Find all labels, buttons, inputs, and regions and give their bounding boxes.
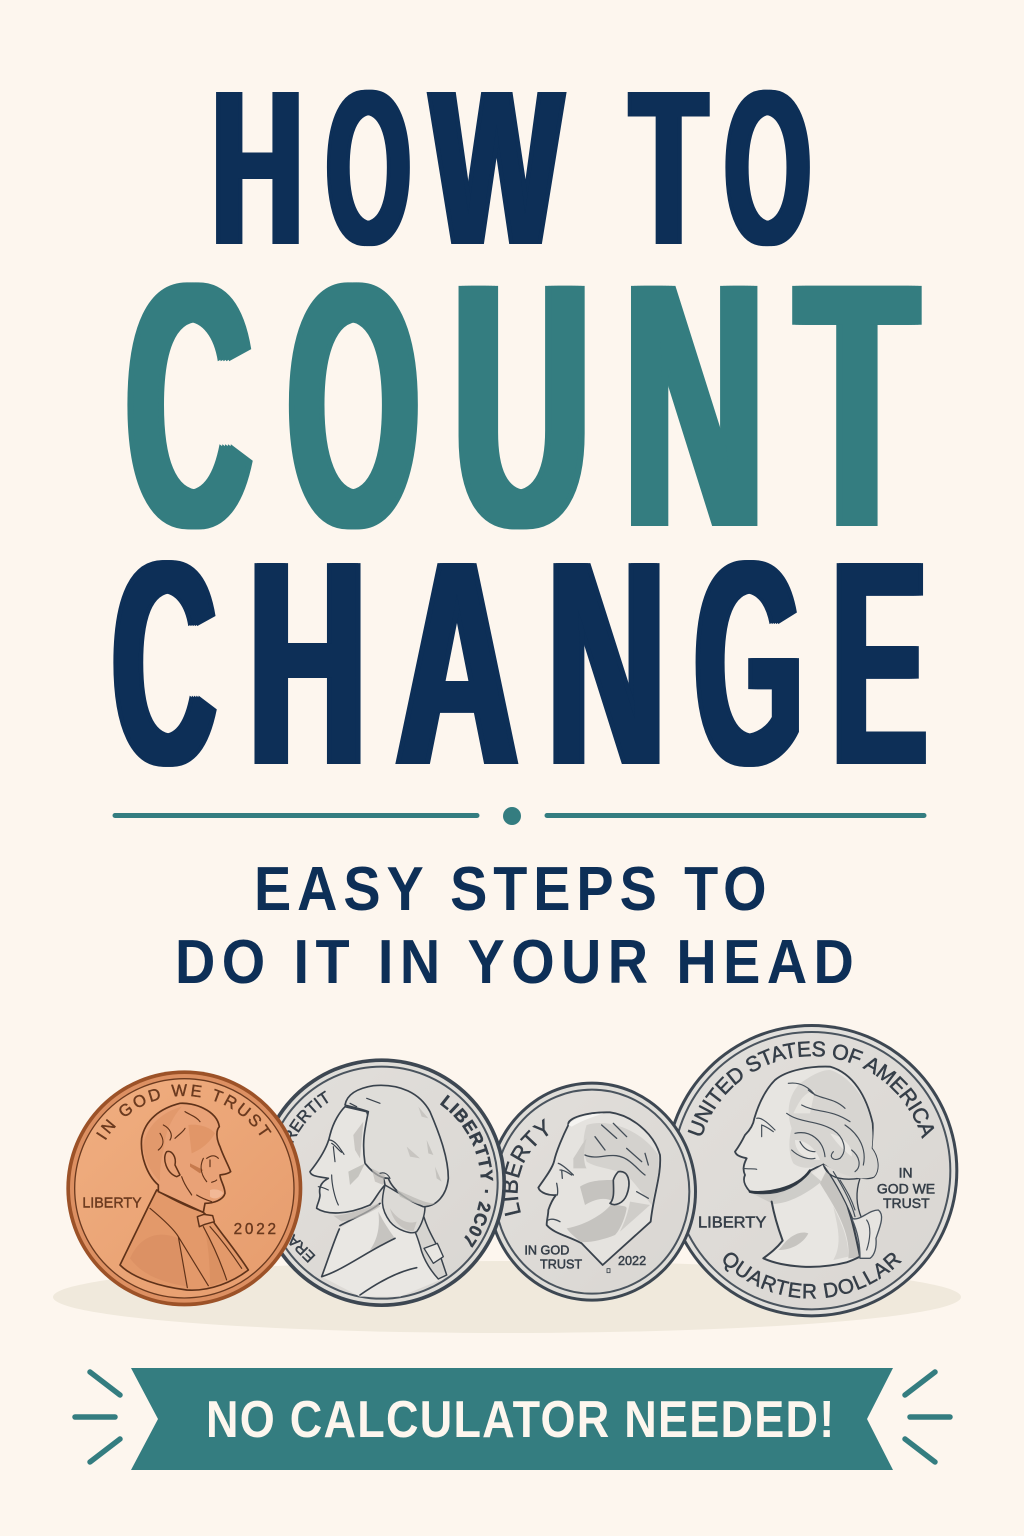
quarter motto: TRUST: [883, 1195, 930, 1211]
title line: HOW TO: H: [212, 44, 303, 291]
title line: CHANGE: G: [694, 500, 803, 826]
Roosevelt ear: [610, 1172, 629, 1205]
nickel lower left legend: ERA: [284, 1230, 319, 1265]
title line: CHANGE: H: [249, 500, 366, 826]
nickel left legend: RERTIT: [287, 1090, 328, 1143]
nickel right legend: ILIBERTTY · 2C07T: [440, 1094, 494, 1248]
Washington portrait: [735, 1067, 882, 1267]
Lincoln lines: [150, 1112, 242, 1288]
Jefferson lower hair: [382, 1185, 425, 1233]
dime motto: TRUST: [540, 1258, 582, 1272]
banner ribbon: [131, 1368, 893, 1470]
coin shadow: [53, 1261, 961, 1333]
banner text: NO CALCULATOR NEEDED!: [206, 1391, 835, 1449]
Roosevelt hair strands: [548, 1123, 648, 1222]
title: [112, 44, 927, 826]
icon: left burst lines: [75, 1372, 120, 1462]
Jefferson jacket: [322, 1203, 444, 1297]
Lincoln ear: [165, 1151, 180, 1177]
Lincoln portrait: [120, 1103, 248, 1290]
icon: nickel: [277, 1058, 506, 1307]
quarter motto: IN: [899, 1165, 913, 1181]
Roosevelt shading: [567, 1113, 659, 1242]
Lincoln coat: [120, 1190, 248, 1290]
icon: quarter: [673, 1024, 958, 1318]
title line: COUNT: U: [453, 210, 590, 600]
quarter motto: GOD WE: [877, 1180, 935, 1196]
Lincoln head: [141, 1103, 231, 1212]
Roosevelt bust: [538, 1112, 660, 1265]
Washington hair highlights: [793, 1090, 852, 1160]
title line: HOW TO: O: [724, 44, 811, 291]
dime motto: [524, 1243, 646, 1272]
Jefferson jacket shading: [370, 1212, 395, 1250]
Jefferson ribbon: [424, 1243, 443, 1263]
dime liberty: LIBERTY: [504, 1118, 548, 1216]
title line: CHANGE: N: [548, 500, 666, 826]
Washington queue: [823, 1165, 862, 1225]
title line: HOW TO: W: [431, 44, 563, 291]
title line: COUNT: C: [126, 210, 252, 600]
title line: COUNT: O: [287, 210, 420, 600]
subtitle line 1: EASY STEPS TO: [254, 855, 773, 924]
Washington neck lines: [763, 1190, 860, 1267]
title line: HOW TO: T: [630, 44, 707, 291]
quarter top legend: UNITED STATES OF AMERICA: [688, 1041, 934, 1139]
Washington neck: [763, 1165, 860, 1267]
dime motto: IN GOD: [524, 1243, 569, 1257]
title line: COUNT: N: [624, 210, 764, 600]
quarter motto: [877, 1165, 935, 1211]
Jefferson face: [310, 1107, 385, 1213]
icon: dime: [495, 1082, 697, 1302]
Washington neck shading: [753, 1170, 860, 1260]
dime mint mark: [607, 1269, 610, 1273]
icon: penny: [66, 1070, 302, 1306]
subtitle: [175, 855, 860, 997]
subtitle line 2: DO IT IN YOUR HEAD: [175, 928, 860, 997]
Washington jaw line: [750, 1171, 810, 1192]
Jefferson facial lines: [318, 1098, 390, 1205]
quarter bottom legend: QUARTER DOLLAR: [723, 1252, 902, 1299]
quarter liberty: LIBERTY: [698, 1214, 767, 1231]
Jefferson jacket lines: [322, 1203, 417, 1295]
Lincoln coat shading: [130, 1232, 227, 1287]
Jefferson queue: [415, 1208, 447, 1279]
divider: [115, 807, 924, 825]
Washington hair strands: [743, 1083, 870, 1250]
icon: right burst lines: [905, 1372, 950, 1462]
Jefferson portrait: [310, 1085, 448, 1297]
title line: CHANGE: A: [396, 500, 518, 826]
Washington bow: [852, 1210, 882, 1258]
dime motto: 2022: [618, 1254, 646, 1268]
title line: HOW TO: O: [326, 44, 411, 291]
Jefferson shading: [333, 1107, 442, 1232]
penny liberty: LIBERTY: [82, 1195, 142, 1211]
Washington head: [735, 1067, 878, 1193]
Washington hair mass: [789, 1070, 878, 1178]
Lincoln highlights: [143, 1107, 223, 1198]
Roosevelt portrait: [538, 1112, 660, 1265]
text: E: [832, 500, 927, 826]
title line: COUNT: T: [796, 210, 917, 600]
Jefferson wig: [345, 1085, 448, 1207]
title line: CHANGE: C: [112, 500, 216, 826]
penny year: 2022: [234, 1221, 276, 1238]
penny motto: IN GOD WE TRUST: [96, 1084, 272, 1140]
Lincoln bow tie: [197, 1214, 214, 1227]
